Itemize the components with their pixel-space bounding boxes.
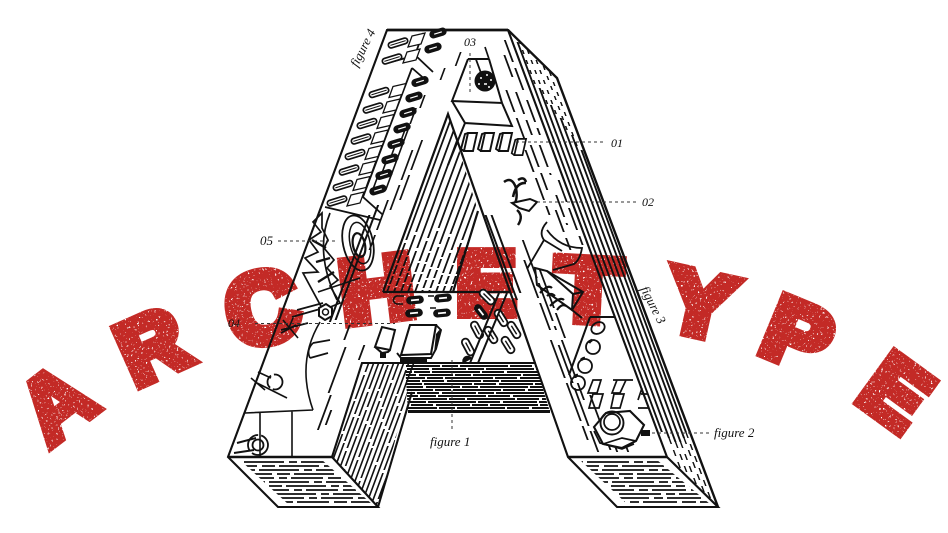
letter R: R bbox=[103, 288, 201, 404]
label 02: 02 bbox=[642, 195, 654, 209]
item 01: row of four chips bbox=[461, 133, 526, 155]
lower left leg parts: knobs and panels bbox=[234, 322, 330, 457]
label figure 2: figure 2 bbox=[714, 425, 755, 440]
connector strip: figure 4 bbox=[327, 28, 447, 215]
letter Y: Y bbox=[657, 248, 743, 359]
capacitor bbox=[375, 327, 395, 358]
figure 2: push button bbox=[594, 411, 650, 449]
label 03: 03 bbox=[464, 35, 476, 49]
label figure 4: figure 4 bbox=[347, 26, 379, 69]
title: ARCHETYPE arched red word bbox=[0, 233, 948, 464]
letter E: E bbox=[457, 233, 515, 332]
lower right panel: holes and small chips bbox=[569, 317, 648, 408]
large chip bbox=[397, 325, 441, 363]
gear and wheel: item 05 bbox=[281, 207, 380, 338]
item 03: raised block with disc bbox=[448, 47, 512, 165]
left leg ticks and inner ridge lines bbox=[284, 52, 473, 430]
component beside the letter T bbox=[527, 222, 583, 318]
label figure 3: figure 3 bbox=[638, 283, 670, 327]
letter C: C bbox=[216, 247, 307, 368]
right side face hatching bbox=[517, 40, 711, 500]
leader lines bbox=[255, 53, 712, 433]
label figure 1: figure 1 bbox=[430, 434, 470, 449]
illustration: isometric letter A bbox=[180, 28, 718, 510]
inner counter triangle hatching bbox=[383, 88, 535, 363]
label 04: 04 bbox=[228, 316, 240, 330]
right leg ticks bbox=[421, 40, 659, 452]
letter T: T bbox=[554, 240, 622, 341]
extruded inner face hatching bbox=[333, 364, 414, 505]
label 05: 05 bbox=[260, 233, 274, 248]
letter A: A bbox=[0, 343, 114, 464]
letter E end: E bbox=[843, 335, 948, 449]
bottom face right hatching bbox=[581, 461, 709, 503]
letter H: H bbox=[335, 236, 419, 343]
central circuit parts bbox=[375, 288, 522, 363]
outer silhouette of the letter bbox=[228, 30, 718, 507]
item 02: hook component bbox=[504, 178, 537, 225]
label 01: 01 bbox=[611, 136, 623, 150]
bottom face left hatching bbox=[244, 461, 371, 503]
letter P: P bbox=[750, 278, 846, 393]
figure 1: crossbar underside hatching bbox=[406, 365, 549, 409]
